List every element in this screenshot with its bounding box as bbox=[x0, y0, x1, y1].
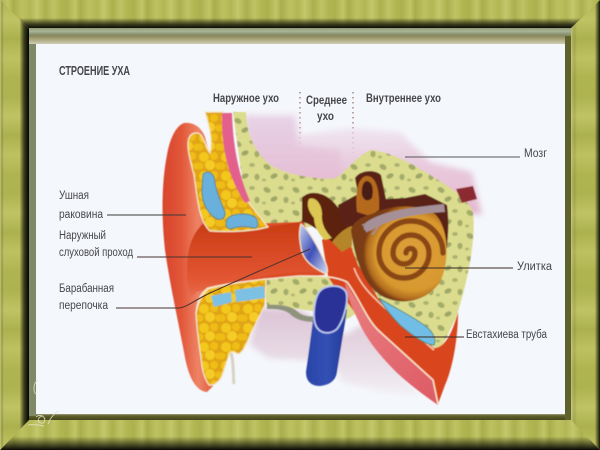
leader: eustachian tube bbox=[405, 336, 464, 338]
label: pinna: Ушная bbox=[59, 190, 89, 202]
lower blue patches bbox=[211, 286, 265, 307]
pink band bbox=[345, 282, 438, 405]
grey bone edge bbox=[267, 305, 320, 322]
heading: middle ear: Среднее bbox=[306, 93, 347, 107]
frame corner ornament bbox=[28, 380, 58, 426]
thin tissue below lobe bbox=[231, 353, 234, 384]
ear canal bbox=[187, 221, 326, 310]
inner red wall bbox=[322, 225, 458, 404]
tissue below the ear bbox=[250, 308, 420, 396]
bone connector bbox=[332, 226, 352, 252]
pink strip bbox=[222, 113, 250, 203]
temporal bone bbox=[233, 112, 474, 350]
blue tube body bbox=[306, 293, 347, 386]
auditory nerve bbox=[364, 204, 445, 231]
heading: middle ear: ухо bbox=[317, 109, 334, 123]
leader: cochlea bbox=[405, 267, 513, 269]
nerve branches bbox=[362, 224, 380, 235]
ossicle bbox=[308, 198, 332, 240]
leader: pinna bbox=[107, 214, 186, 216]
label: ear canal second line: слуховой проход bbox=[59, 247, 133, 259]
cochlea body bbox=[351, 206, 447, 301]
label: eardrum second line: перепочка bbox=[59, 300, 109, 312]
eustachian lining bbox=[354, 268, 434, 350]
leader: ear canal bbox=[137, 256, 252, 258]
label: eustachian tube: Евстахиева труба bbox=[466, 329, 548, 341]
inner ear cavity bbox=[338, 171, 448, 275]
semicircular canal bbox=[356, 176, 379, 216]
ear anatomy illustration bbox=[163, 112, 482, 405]
brain tissue haze bbox=[244, 113, 482, 215]
label: brain: Мозг bbox=[524, 148, 547, 160]
lower blue cartilage bbox=[226, 214, 258, 229]
lower fatty tissue bbox=[196, 279, 266, 385]
label: eardrum: Барабанная bbox=[59, 283, 114, 295]
heading: outer ear: Наружное ухо bbox=[213, 91, 279, 105]
middle ear cavity bbox=[302, 193, 350, 242]
white picture panel bbox=[36, 44, 565, 414]
blue canal strip bbox=[379, 298, 435, 345]
section dividers bbox=[300, 92, 353, 163]
canal lower cream edge bbox=[196, 276, 300, 314]
label: ear canal: Наружный bbox=[59, 230, 106, 242]
blue tube opening bbox=[314, 286, 347, 333]
title: СТРОЕНИЕ УХА bbox=[59, 64, 130, 78]
upper fatty tissue bbox=[188, 112, 268, 232]
label: cochlea: Улитка bbox=[517, 261, 553, 273]
outer ear pinna bbox=[163, 123, 325, 392]
leader: brain bbox=[405, 156, 520, 158]
heading: inner ear: Внутреннее ухо bbox=[366, 91, 441, 105]
eardrum bbox=[300, 224, 327, 274]
cream edge line bbox=[300, 276, 438, 404]
bone under the ear canal bbox=[263, 276, 362, 322]
heading: middle ear bbox=[306, 93, 347, 123]
blood vessel stub bbox=[456, 186, 477, 203]
label: pinna second line: раковина bbox=[59, 209, 104, 221]
cochlea spiral bbox=[379, 221, 443, 278]
upper blue cartilage bbox=[202, 172, 225, 219]
leader: eardrum bbox=[116, 249, 310, 308]
